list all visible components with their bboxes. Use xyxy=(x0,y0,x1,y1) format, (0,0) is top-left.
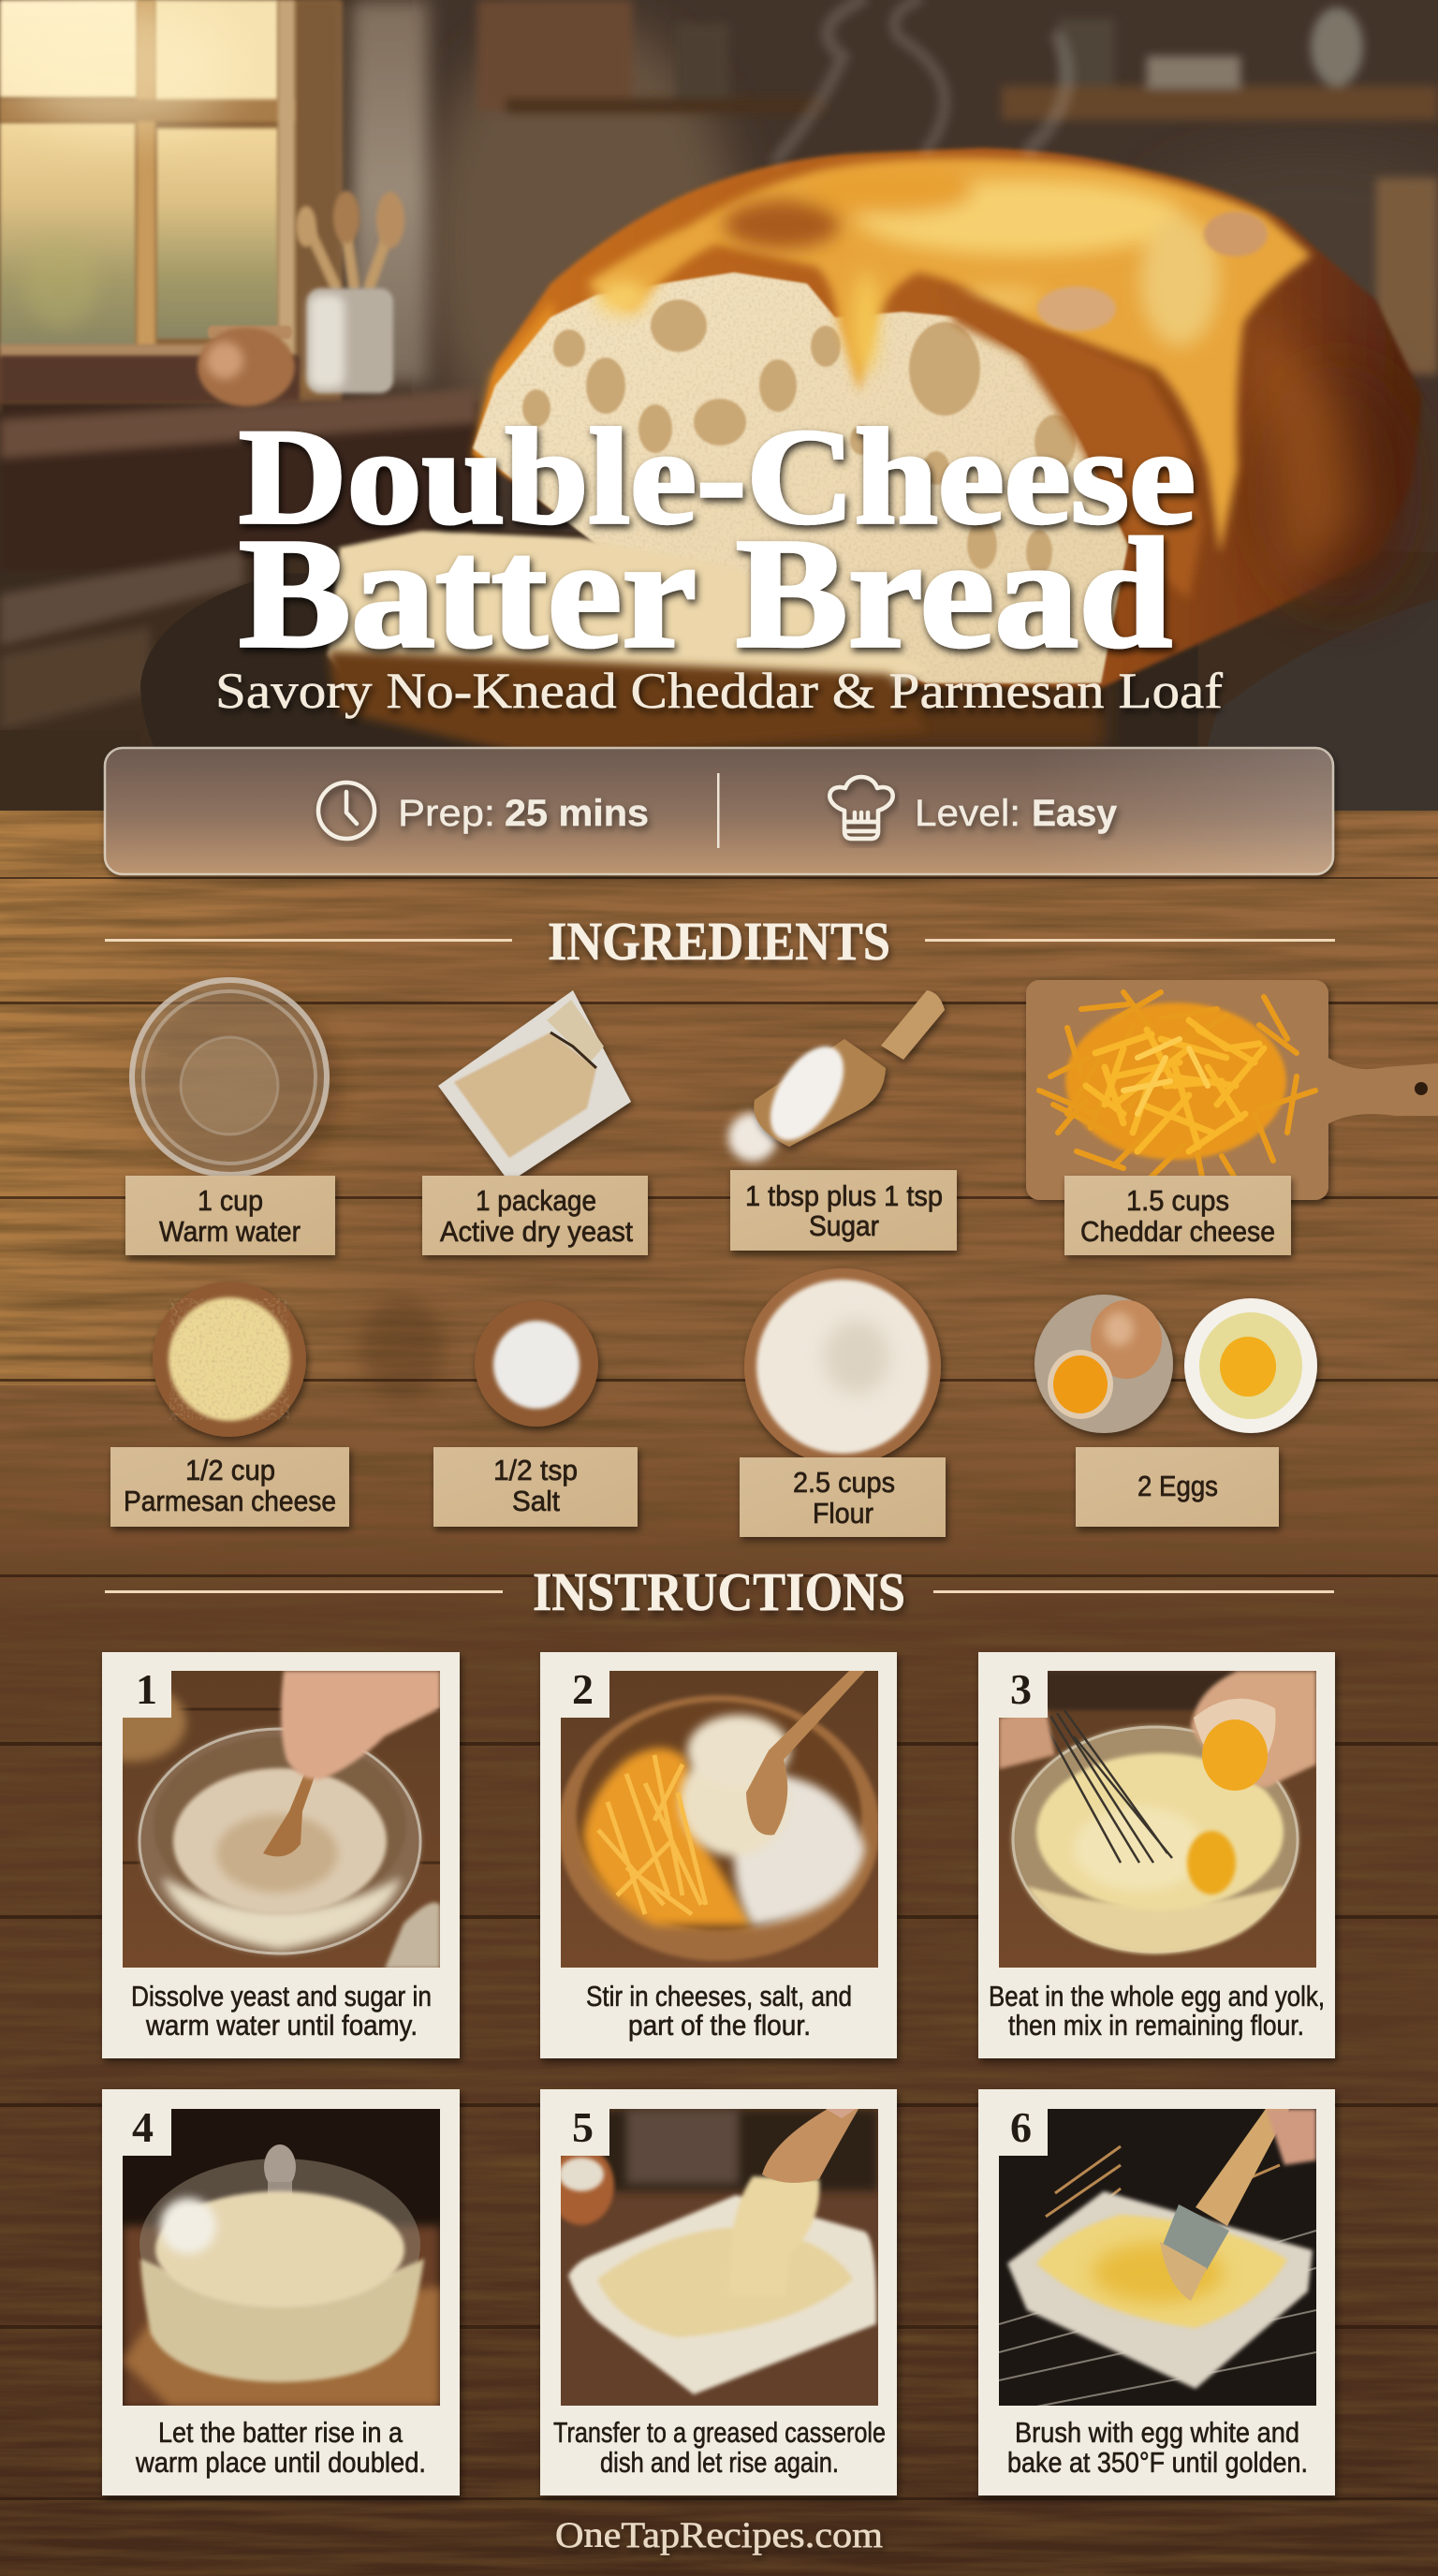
step 5 photo xyxy=(549,2109,878,2407)
label: yeast: Active dry yeast xyxy=(440,1215,633,1248)
step 2 number: 2 xyxy=(572,1665,594,1713)
step 1 number: 1 xyxy=(136,1665,157,1713)
step 3 text: then mix in remaining flour. xyxy=(1008,2009,1304,2042)
label: salt: Salt xyxy=(512,1485,560,1517)
label: eggs xyxy=(1076,1447,1279,1527)
label: cheddar: Cheddar cheese xyxy=(1080,1215,1275,1248)
ingredient: salt bowl xyxy=(475,1301,598,1427)
step 6 text: bake at 350°F until golden. xyxy=(1007,2446,1308,2479)
bread crumb xyxy=(468,267,1133,688)
step 4 text xyxy=(135,2416,426,2479)
title: Double-Cheese xyxy=(239,401,1196,552)
serving board and cloth xyxy=(140,573,1438,811)
step 2 number xyxy=(561,1665,609,1718)
label: sugar: 1 tbsp plus 1 tsp xyxy=(745,1179,943,1212)
label: sugar xyxy=(730,1170,957,1251)
bread slice xyxy=(325,528,917,690)
label: flour xyxy=(740,1457,946,1537)
step 1 number xyxy=(123,1665,171,1718)
label: salt xyxy=(433,1447,638,1527)
crust shading xyxy=(1255,365,1423,608)
info bar xyxy=(105,748,1333,874)
prep time: Prep: xyxy=(398,793,495,834)
step 6 text: Brush with egg white and xyxy=(1015,2416,1299,2449)
label: yeast xyxy=(422,1176,648,1255)
step 3 card xyxy=(978,1652,1335,2058)
label: parmesan: 1/2 cup xyxy=(185,1454,275,1486)
jar and wooden spoons xyxy=(198,191,404,406)
title: Batter Bread xyxy=(239,506,1172,681)
step 1 text: Dissolve yeast and sugar in xyxy=(131,1980,432,2012)
step 2 text xyxy=(586,1980,852,2042)
label: warm water: 1 cup xyxy=(198,1184,263,1217)
icon: chef hat xyxy=(829,777,893,839)
ingredient: flour bowl xyxy=(744,1268,941,1465)
heading: instructions xyxy=(105,1561,1334,1622)
hero photo: cheesy loaf in rustic kitchen xyxy=(0,0,1438,811)
prep time: 25 mins xyxy=(505,793,649,834)
label: flour: 2.5 cups xyxy=(793,1466,895,1499)
step 1 card xyxy=(78,1652,460,2058)
ingredient: parmesan bowl xyxy=(153,1281,306,1437)
ingredient: shredded cheddar on board xyxy=(1026,980,1438,1200)
step 4 card xyxy=(102,2089,460,2496)
difficulty level xyxy=(915,793,1118,834)
step 4 text: warm place until doubled. xyxy=(135,2446,426,2479)
step 6 number: 6 xyxy=(1010,2103,1032,2151)
ingredient: eggs xyxy=(1034,1295,1317,1433)
label: warm water: Warm water xyxy=(159,1215,301,1248)
step 3 text: Beat in the whole egg and yolk, xyxy=(989,1980,1325,2012)
label: salt: 1/2 tsp xyxy=(493,1454,578,1486)
title xyxy=(239,401,1196,681)
label: cheddar xyxy=(1064,1176,1291,1255)
step 3 text xyxy=(989,1980,1325,2042)
window counter xyxy=(0,388,477,532)
loaf of bread xyxy=(328,148,1423,758)
prep time xyxy=(398,793,649,834)
window with sunlight xyxy=(0,0,428,412)
step 5 number xyxy=(561,2103,609,2156)
label: eggs: 2 Eggs xyxy=(1137,1470,1218,1502)
ingredient: sugar scoop xyxy=(728,990,945,1162)
shelves with crockery xyxy=(477,0,1438,374)
step 4 number: 4 xyxy=(132,2103,154,2151)
step 1 text xyxy=(131,1980,432,2042)
step 1 text: warm water until foamy. xyxy=(145,2009,418,2042)
step 6 card xyxy=(978,2089,1335,2496)
step 3 number xyxy=(999,1665,1048,1718)
difficulty level: Level: xyxy=(915,793,1020,834)
step 6 number xyxy=(999,2103,1048,2156)
heading: ingredients xyxy=(105,911,1335,972)
melted cheese xyxy=(587,158,1312,554)
step 5 number: 5 xyxy=(572,2103,594,2151)
step 4 photo xyxy=(123,2109,440,2408)
ingredient: water bowl xyxy=(129,977,341,1185)
wooden table xyxy=(0,530,1438,730)
step 1 photo xyxy=(78,1671,440,1969)
step 5 text: Transfer to a greased casserole xyxy=(553,2416,886,2449)
step 2 photo xyxy=(558,1671,880,1969)
steam xyxy=(777,0,1067,159)
icon: clock xyxy=(318,783,374,839)
step 4 number xyxy=(123,2103,171,2156)
heading: instructions: INSTRUCTIONS xyxy=(533,1561,905,1622)
step 5 card xyxy=(540,2089,897,2496)
label: flour: Flour xyxy=(813,1497,873,1530)
step 3 photo xyxy=(999,1671,1316,1969)
label: sugar: Sugar xyxy=(809,1209,879,1242)
step 4 text: Let the batter rise in a xyxy=(158,2416,404,2449)
step 6 photo xyxy=(999,2109,1316,2407)
label: parmesan: Parmesan cheese xyxy=(124,1485,336,1517)
step 2 card xyxy=(540,1652,897,2058)
label: parmesan xyxy=(110,1447,349,1527)
label: yeast: 1 package xyxy=(476,1184,596,1217)
label: cheddar: 1.5 cups xyxy=(1126,1184,1229,1217)
step 3 number: 3 xyxy=(1010,1665,1032,1713)
label: warm water xyxy=(125,1176,335,1255)
subtitle: Savory No-Knead Cheddar & Parmesan Loaf xyxy=(215,663,1223,719)
difficulty level: Easy xyxy=(1032,793,1118,834)
footer website: OneTapRecipes.com xyxy=(555,2515,883,2555)
heading: ingredients: INGREDIENTS xyxy=(548,911,890,972)
step 2 text: Stir in cheeses, salt, and xyxy=(586,1980,852,2012)
step 2 text: part of the flour. xyxy=(628,2009,811,2042)
wood plank background xyxy=(0,805,1438,2576)
kitchen wall xyxy=(412,0,1438,562)
step 5 text: dish and let rise again. xyxy=(600,2446,839,2479)
step 5 text xyxy=(553,2416,886,2479)
step 6 text xyxy=(1007,2416,1308,2479)
ingredient: yeast packet xyxy=(438,990,631,1182)
